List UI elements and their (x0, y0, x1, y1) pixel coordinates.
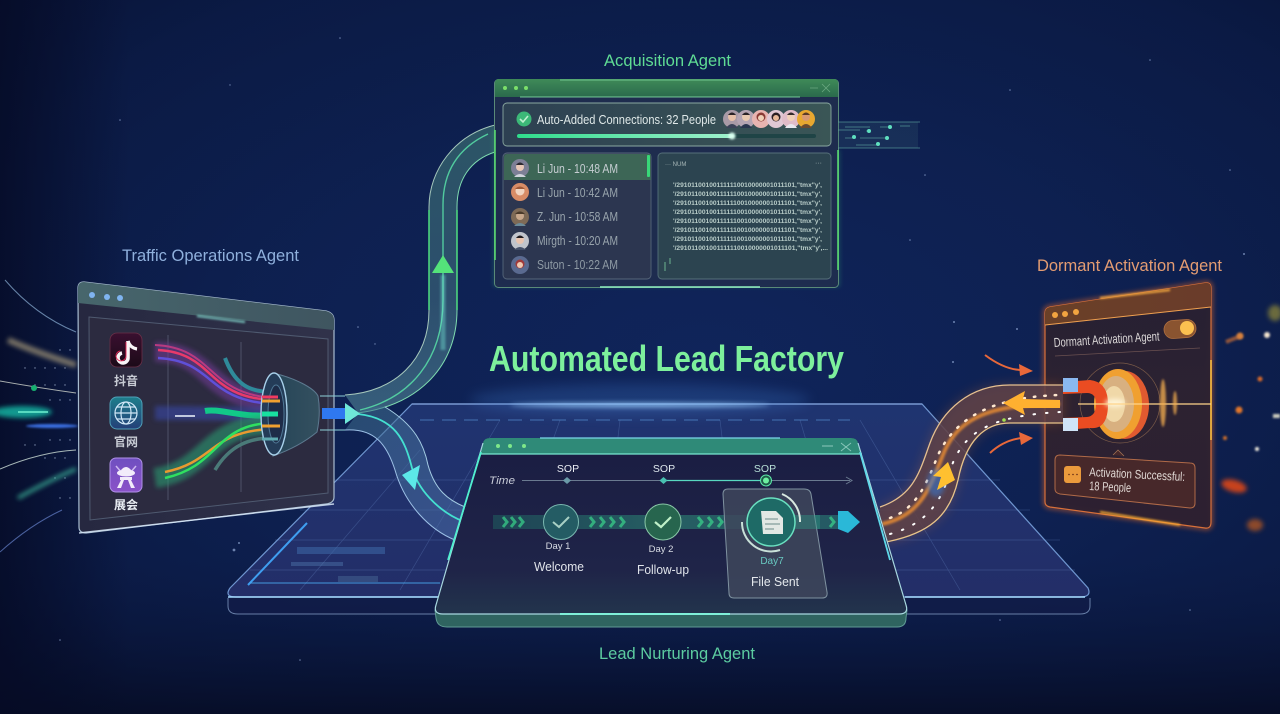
step: day 1 welcome: Welcome (534, 559, 584, 574)
window: traffic operations (78, 282, 334, 533)
panel: code log: '/291011001001111110010000001011101,"tmx"y', (673, 192, 822, 198)
panel: code log: '/291011001001111110010000001011101,"tmx"y', (673, 219, 822, 225)
label: traffic operations agent: Traffic Operations Agent (122, 246, 299, 265)
row: Li Jun 10:48 (511, 159, 618, 177)
flow lines to funnel (155, 345, 272, 478)
window: acquisition agent (494, 79, 838, 288)
step: day 1 welcome: Day 1 (546, 541, 570, 552)
tube: nurturing to dormant (orange) (880, 385, 1063, 543)
icon: web globe (110, 397, 142, 429)
arrow: teal down (402, 465, 420, 490)
card: day 7 file sent: Day7 (760, 556, 784, 567)
row: Z. Jun 10:58: Z. Jun - 10:58 AM (537, 210, 618, 224)
tube: traffic to nurturing (down) (345, 407, 465, 540)
text: activation result: 18 People (1089, 479, 1132, 495)
title: Automated Lead Factory (489, 338, 844, 379)
tube: traffic to acquisition (up) (345, 125, 495, 413)
window dots (503, 86, 528, 90)
panel: connection list (503, 153, 651, 279)
icon: chat bubble (1064, 466, 1081, 483)
label: dormant activation agent: Dormant Activation Agent (1037, 256, 1222, 275)
row: Mirgth 10:20: Mirgth - 10:20 AM (537, 234, 618, 248)
row: Z. Jun 10:58 (511, 208, 618, 226)
label: website: 官网 (114, 434, 138, 449)
callout: activation successful (1055, 450, 1195, 508)
timeline: SOP (653, 463, 675, 475)
step: day 1 welcome (534, 504, 584, 574)
card: day 7 file sent: File Sent (751, 574, 799, 589)
row: Li Jun 10:42 (511, 183, 618, 201)
label: expo: 展会 (114, 497, 138, 512)
window: dormant activation (1045, 283, 1211, 528)
sparks: right side (1220, 305, 1280, 531)
step: day 2 follow-up: Day 2 (649, 544, 673, 555)
funnel (273, 373, 319, 456)
icon: document (761, 511, 783, 534)
arrow: gold left tube (1003, 391, 1060, 415)
panel: code log: ··· NUM (665, 162, 686, 168)
panel: code log: '/291011001001111110010000001011101,"tmx"y', (673, 201, 822, 207)
timeline: SOP (557, 463, 579, 475)
card: day 7 file sent (723, 489, 827, 598)
row: Li Jun 10:48: Li Jun - 10:48 AM (537, 162, 618, 176)
text: activation result: Activation Successful: (1089, 465, 1185, 484)
panel: code log: '/291011001001111110010000001011101,"tmx"y',... (673, 246, 828, 252)
row: Li Jun 10:42: Li Jun - 10:42 AM (537, 186, 618, 200)
icon: event booth (110, 458, 142, 492)
arrow: gold up tube (933, 462, 955, 490)
label: lead nurturing agent: Lead Nurturing Agent (599, 644, 755, 663)
panel: code log: '/291011001001111110010000001011101,"tmx"y', (673, 183, 822, 189)
text: window heading: Dormant Activation Agent (1053, 329, 1160, 350)
icon: check (516, 112, 532, 126)
label: acquisition agent: Acquisition Agent (604, 51, 731, 70)
left streaks: incoming traffic (0, 280, 78, 552)
toggle (1163, 319, 1197, 339)
window: lead nurturing (435, 438, 907, 627)
text: activation result (1089, 465, 1185, 495)
step: day 2 follow-up (637, 504, 689, 577)
timeline: SOP (754, 463, 776, 475)
label: tiktok: 抖音 (114, 373, 138, 388)
panel: connections summary (503, 103, 831, 146)
row: Mirgth 10:20 (511, 232, 618, 250)
panel: code log: '/291011001001111110010000001011101,"tmx"y', (673, 228, 822, 234)
arrow: funnel output (320, 396, 360, 430)
panel: code log: '/291011001001111110010000001011101,"tmx"y', (673, 210, 822, 216)
window dots (496, 444, 526, 448)
avatars (723, 110, 815, 128)
window dots (1052, 309, 1079, 318)
panel: code log: '/291011001001111110010000001011101,"tmx"y', (673, 237, 822, 243)
text: connections: Auto-Added Connections: 32 People (537, 112, 716, 127)
progress bar (517, 132, 816, 140)
icon: tiktok (110, 333, 142, 367)
panel: code log: ··· (815, 160, 822, 167)
timeline (489, 463, 852, 487)
row: Suton 10:22: Suton - 10:22 AM (537, 258, 618, 272)
arrow: green up (432, 255, 454, 273)
icon: magnet and target (1063, 363, 1211, 443)
arrows: attraction (985, 355, 1033, 453)
timeline: Time (489, 475, 515, 487)
panel: code log (658, 153, 831, 279)
row: Suton 10:22 (511, 256, 618, 274)
window dots (89, 292, 123, 301)
platform: glass factory floor (228, 384, 1090, 614)
circuit lines: acquisition output (838, 122, 920, 148)
arrow: chevron progress track (493, 511, 860, 533)
step: day 2 follow-up: Follow-up (637, 562, 689, 577)
